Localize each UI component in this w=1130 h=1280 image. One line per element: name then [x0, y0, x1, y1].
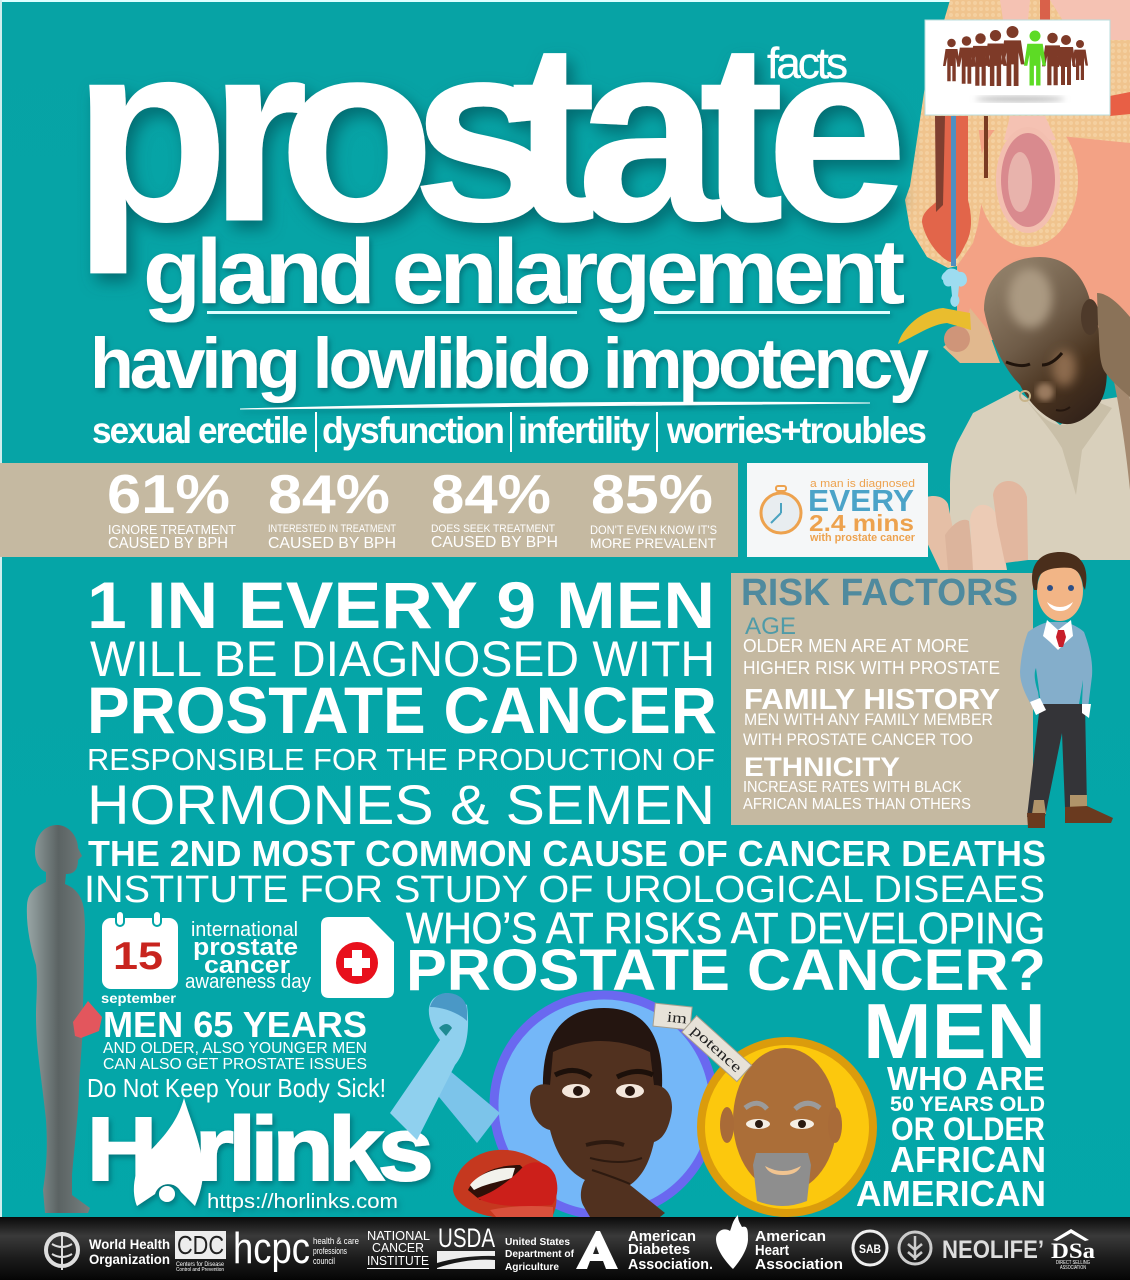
logo: National Cancer Institute: NATIONAL [367, 1228, 430, 1243]
icon: calendar: september [101, 990, 177, 1006]
text: awareness day: cancer [204, 952, 290, 979]
logo: American Diabetes Association: American [628, 1229, 696, 1245]
callout: every 2.4 mins: with prostate cancer [809, 532, 916, 544]
logo: DSA: DSa [1051, 1238, 1095, 1263]
panel: statistics band: DOES SEEK TREATMENT [431, 523, 555, 535]
panel: risk factors: HIGHER RISK WITH PROSTATE [743, 658, 1000, 678]
illustration: body silhouette [27, 825, 90, 1213]
heading: gland enlargement: gland enlargement [143, 221, 905, 323]
panel: risk factors: INCREASE RATES WITH BLACK [743, 779, 962, 796]
heading: who's at risk: PROSTATE CANCER? [406, 938, 1046, 1003]
logo: American Diabetes Association: Diabetes [628, 1242, 690, 1258]
text: men 65 years: MEN 65 YEARS [103, 1004, 367, 1045]
text: awareness day: prostate [193, 934, 298, 961]
panel: statistics band: IGNORE TREATMENT [108, 522, 236, 537]
panel: risk factors: MEN WITH ANY FAMILY MEMBER [744, 710, 993, 729]
subheading list: worries+troubles [666, 410, 926, 451]
logo: American Heart Association [716, 1215, 843, 1273]
label: impotence paper scraps [653, 1003, 752, 1082]
text: men who are: AFRICAN [890, 1139, 1046, 1180]
logo: USDA: United States [505, 1236, 570, 1248]
logo: Horlinks: H [87, 1100, 157, 1200]
text: awareness day: awareness day [185, 971, 311, 993]
headline: 1 in every 9 men: PROSTATE CANCER [87, 673, 717, 747]
illustration: cartoon man in sweater [1020, 552, 1113, 828]
illustration: baby feet [915, 481, 1028, 570]
callout: every 2.4 mins: a man is diagnosed [810, 478, 915, 490]
panel: risk factors: ETHNICITY [744, 752, 900, 782]
label: facts: facts [767, 39, 847, 88]
icon: calendar [101, 911, 178, 1006]
callout: every 2.4 mins [747, 463, 928, 557]
logo: World Health Organization [46, 1232, 170, 1270]
subheading list: dysfunction [322, 410, 503, 451]
logo: DSA [1051, 1229, 1095, 1271]
panel: risk factors: WITH PROSTATE CANCER TOO [743, 730, 973, 749]
heading: having low libido impotency: having lowlibido impotency [90, 325, 930, 404]
icon: one in nine men [925, 20, 1110, 115]
panel: statistics band: MORE PREVALENT [590, 535, 716, 551]
logo: CDC [175, 1230, 226, 1273]
heading: cause of deaths: THE 2ND MOST COMMON CAUSE OF CANCER DEATHS [88, 833, 1046, 874]
logo: USDA [437, 1223, 574, 1273]
logo: CDC: Control and Prevention [176, 1267, 224, 1273]
logo: USDA: USDA [438, 1223, 495, 1253]
text: men 65 years: AND OLDER, ALSO YOUNGER MEN [103, 1040, 367, 1057]
logo: USDA: Agriculture [505, 1261, 559, 1273]
logo: hcpc: hcpc [233, 1224, 310, 1273]
heading: cause of deaths: INSTITUTE FOR STUDY OF UROLOGICAL DISEAES [84, 869, 1045, 911]
text: awareness day [185, 919, 311, 993]
logo: NeoLife: NEOLIFE’ [942, 1236, 1044, 1264]
subheading list: sexual erectile [92, 410, 307, 451]
illustration: anatomy cross-section [905, 0, 1130, 340]
text: men who are: 50 YEARS OLD [890, 1093, 1045, 1116]
panel: statistics band: 84% [268, 463, 390, 525]
callout: every 2.4 mins: EVERY [808, 483, 914, 518]
logo: CDC: Centers for Disease [176, 1262, 225, 1268]
icon: semen drop [942, 269, 967, 307]
heading: who's at risk [406, 904, 1046, 1003]
panel: risk factors: AFRICAN MALES THAN OTHERS [743, 796, 971, 813]
panel: statistics band: CAUSED BY BPH [268, 535, 396, 552]
logo: wheat seal [899, 1232, 931, 1264]
text: men 65 years: CAN ALSO GET PROSTATE ISSUES [103, 1056, 367, 1073]
logo: hcpc: council [313, 1256, 335, 1266]
panel: statistics band: DON'T EVEN KNOW IT'S [590, 525, 717, 537]
text: awareness day: international [191, 919, 298, 941]
logo: American Diabetes Association: Association. [628, 1257, 713, 1273]
logo: SAB seal: SAB [859, 1242, 881, 1256]
panel: statistics band: CAUSED BY BPH [431, 534, 558, 551]
headline: 1 in every 9 men: 1 IN EVERY 9 MEN [87, 568, 715, 642]
illustration: older man avatar [701, 1041, 873, 1213]
icon: calendar: 15 [113, 935, 163, 978]
headline: 1 in every 9 men: HORMONES & SEMEN [87, 773, 715, 836]
text: men who are: WHO ARE [887, 1060, 1045, 1097]
heading: who's at risk: WHO’S AT RISKS AT DEVELOPING [406, 904, 1045, 953]
logo: DSA: ASSOCIATION [1060, 1265, 1086, 1271]
panel: statistics band: 61% [107, 463, 230, 525]
label: impotence paper scraps: potence [688, 1023, 745, 1076]
logo: SAB seal [853, 1231, 887, 1265]
panel: statistics band: INTERESTED IN TREATMENT [268, 523, 396, 535]
logo: hcpc: professions [313, 1246, 347, 1256]
logo: American Diabetes Association [576, 1229, 713, 1273]
logo: DSA: DIRECT SELLING [1056, 1260, 1090, 1266]
icon: medical document [321, 917, 394, 998]
panel: statistics band: 84% [431, 463, 551, 525]
logo: hcpc: health & care [313, 1236, 359, 1246]
icon: red prostate [73, 1001, 102, 1038]
panel: risk factors: RISK FACTORS [741, 572, 1018, 614]
panel: risk factors: AGE [745, 613, 796, 640]
icon: awareness ribbon [390, 993, 500, 1143]
illustration: lips and strawberry [453, 1150, 557, 1218]
logo: National Cancer Institute: CANCER [372, 1240, 424, 1255]
subheading list: infertility [518, 410, 650, 451]
logo: Horlinks: rlinks [195, 1100, 430, 1200]
logo: American Heart Association: Heart [755, 1243, 789, 1259]
logo: Horlinks [87, 1098, 430, 1213]
logo: CDC: CDC [177, 1230, 224, 1260]
text: men 65 years: Do Not Keep Your Body Sick! [87, 1073, 386, 1103]
panel: statistics band [0, 463, 738, 557]
logo: Horlinks: https://horlinks.com [207, 1191, 398, 1213]
headline: 1 in every 9 men: RESPONSIBLE FOR THE PRODUCTION OF [87, 742, 715, 777]
panel: risk factors [731, 572, 1033, 825]
callout: every 2.4 mins: 2.4 mins [809, 510, 914, 536]
subheading list [92, 410, 926, 452]
illustration: hand holding banana [898, 308, 1000, 363]
logo: World Health Organization: Organization [89, 1251, 170, 1267]
logo: American Heart Association: American [755, 1229, 826, 1245]
panel: risk factors: FAMILY HISTORY [744, 684, 1000, 716]
panel: risk factors: OLDER MEN ARE AT MORE [743, 636, 969, 656]
headline: 1 in every 9 men: WILL BE DIAGNOSED WITH [90, 631, 715, 687]
headline: 1 in every 9 men [87, 568, 717, 836]
logo: National Cancer Institute: INSTITUTE [367, 1253, 429, 1268]
text: men who are [856, 987, 1046, 1214]
text: men who are: MEN [863, 987, 1046, 1075]
panel: partner logos footer [0, 1215, 1130, 1280]
illustration: worried man [950, 257, 1130, 560]
logo: American Heart Association: Association [755, 1257, 843, 1273]
label: impotence paper scraps: im [666, 1010, 688, 1028]
text: men who are: OR OLDER [891, 1111, 1045, 1147]
logo: USDA: Department of [505, 1248, 574, 1260]
logo: National Cancer Institute [367, 1228, 430, 1269]
heading: cause of deaths [84, 833, 1046, 911]
logo: World Health Organization: World Health [89, 1236, 170, 1252]
text: men who are: AMERICAN [856, 1173, 1046, 1214]
illustration: younger man avatar [494, 995, 714, 1217]
panel: statistics band: CAUSED BY BPH [108, 535, 228, 552]
panel: statistics band: 85% [591, 463, 713, 525]
text: men 65 years [87, 1004, 386, 1103]
